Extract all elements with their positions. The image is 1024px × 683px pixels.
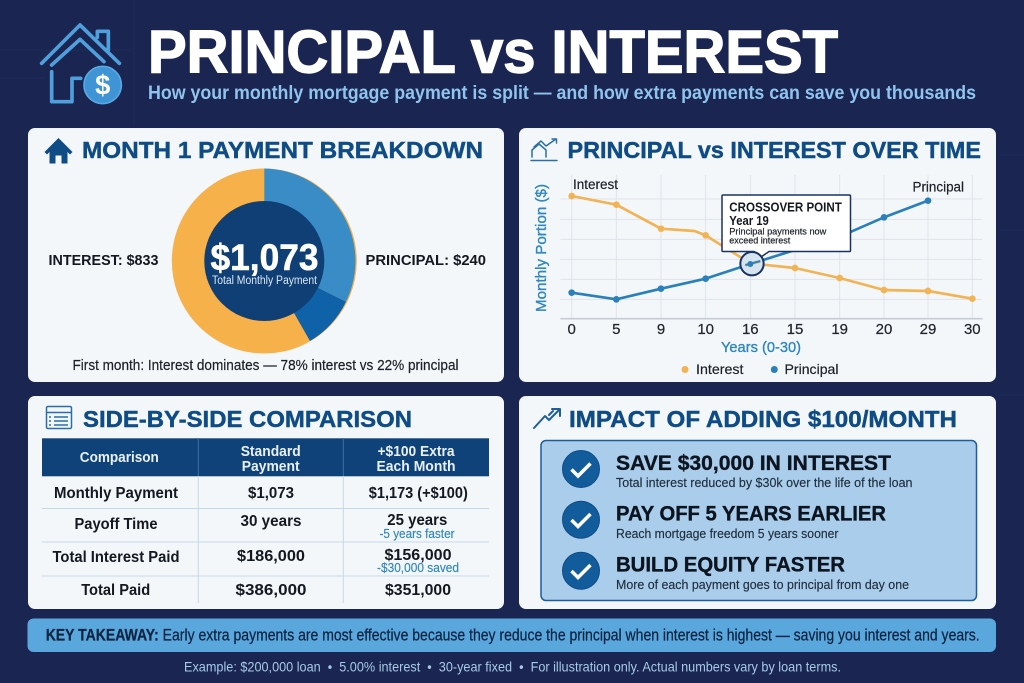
panel: side-by-side comparison bbox=[28, 396, 504, 609]
comparison table: Monthly Payment bbox=[54, 485, 179, 502]
x axis ticks: 9 bbox=[657, 321, 665, 338]
x axis ticks: 29 bbox=[920, 321, 936, 338]
callout: crossover point: Year 19 bbox=[729, 214, 769, 228]
x axis ticks: 30 bbox=[964, 321, 981, 338]
caption: First month: Interest dominates — 78% interest vs 22% principal bbox=[72, 358, 458, 374]
series label: principal: Principal bbox=[912, 180, 964, 194]
panel: month 1 payment breakdown bbox=[28, 128, 504, 382]
label: interest: INTEREST: $833 bbox=[48, 253, 158, 269]
x axis ticks: 15 bbox=[787, 321, 803, 338]
x axis ticks: 10 bbox=[697, 321, 714, 338]
title: PRINCIPAL vs INTEREST bbox=[148, 18, 838, 86]
comparison table: Total Interest Paid bbox=[52, 549, 180, 566]
comparison table: Total Paid bbox=[81, 582, 150, 599]
icon: line chart bbox=[531, 139, 557, 160]
comparison table: -5 years faster bbox=[380, 527, 454, 541]
comparison table: $1,173 (+$100) bbox=[369, 485, 468, 502]
benefit: save interest: Total interest reduced by $30k over the life of the loan bbox=[616, 475, 912, 490]
comparison table: Payment bbox=[242, 459, 300, 475]
heading: PRINCIPAL vs INTEREST OVER TIME bbox=[568, 137, 981, 163]
panel: impact of adding $100/month bbox=[519, 396, 996, 609]
comparison table: Payoff Time bbox=[74, 516, 158, 533]
legend: Principal bbox=[784, 361, 838, 377]
comparison table: 25 years bbox=[387, 512, 447, 529]
crossover marker bbox=[740, 252, 764, 275]
icon: house bbox=[44, 138, 72, 164]
x axis ticks: 5 bbox=[612, 321, 620, 338]
label: principal: PRINCIPAL: $240 bbox=[366, 253, 486, 269]
comparison table: Each Month bbox=[376, 459, 456, 475]
x axis ticks bbox=[568, 321, 981, 338]
comparison table bbox=[42, 438, 489, 603]
x axis ticks: 20 bbox=[876, 321, 892, 338]
benefit: pay off earlier: Reach mortgage freedom 5 years sooner bbox=[616, 526, 839, 541]
benefit: pay off earlier: PAY OFF 5 YEARS EARLIER bbox=[616, 503, 886, 526]
heading: SIDE-BY-SIDE COMPARISON bbox=[83, 406, 412, 432]
x axis ticks: 0 bbox=[568, 321, 576, 338]
x axis label: Years (0-30) bbox=[721, 339, 801, 356]
benefit: pay off earlier bbox=[562, 501, 886, 541]
callout: crossover point: exceed interest bbox=[729, 236, 791, 246]
benefit: build equity: More of each payment goes to principal from day one bbox=[616, 577, 909, 592]
line chart bbox=[533, 175, 983, 377]
donut chart bbox=[172, 168, 357, 354]
callout: crossover point bbox=[722, 195, 850, 257]
callout: crossover point: CROSSOVER POINT bbox=[729, 200, 842, 214]
comparison table: Standard bbox=[241, 444, 301, 460]
comparison table: $351,000 bbox=[385, 582, 451, 599]
icon: rising arrows bbox=[534, 409, 560, 428]
donut chart: Total Monthly Payment bbox=[212, 275, 318, 287]
x axis ticks: 19 bbox=[831, 321, 848, 338]
comparison table: $386,000 bbox=[236, 582, 307, 599]
comparison table: -$30,000 saved bbox=[377, 561, 459, 575]
icon: house with dollar coin bbox=[42, 25, 123, 106]
heading: MONTH 1 PAYMENT BREAKDOWN bbox=[82, 137, 483, 163]
benefits box bbox=[541, 440, 976, 600]
benefit: build equity bbox=[562, 552, 909, 592]
comparison table: +$100 Extra bbox=[378, 444, 455, 460]
callout: crossover point: Principal payments now bbox=[729, 226, 826, 238]
panel: principal vs interest over time bbox=[519, 128, 996, 382]
benefit: build equity: BUILD EQUITY FASTER bbox=[616, 554, 845, 577]
comparison table: $1,073 bbox=[248, 485, 294, 502]
icon: table list bbox=[46, 406, 72, 428]
benefit: save interest bbox=[562, 450, 912, 490]
legend bbox=[682, 361, 838, 377]
legend: Interest bbox=[696, 361, 744, 377]
comparison table: $156,000 bbox=[384, 547, 452, 564]
icon: house with dollar coin: $ bbox=[95, 70, 110, 101]
footnote: Example: $200,000 loan • 5.00% interest • 30-year fixed • For illustration only. Actual numbers vary by loan terms. bbox=[184, 658, 841, 674]
series label: interest: Interest bbox=[573, 177, 618, 192]
comparison table: $186,000 bbox=[237, 548, 305, 565]
x axis ticks: 16 bbox=[742, 321, 759, 338]
donut chart: $1,073 bbox=[210, 237, 318, 278]
heading: IMPACT OF ADDING $100/MONTH bbox=[569, 406, 957, 432]
key takeaway banner bbox=[28, 618, 996, 652]
comparison table: 30 years bbox=[240, 513, 302, 530]
y axis label: Monthly Portion ($) bbox=[533, 184, 550, 312]
benefit: save interest: SAVE $30,000 IN INTEREST bbox=[616, 452, 891, 475]
comparison table: Comparison bbox=[80, 450, 159, 466]
